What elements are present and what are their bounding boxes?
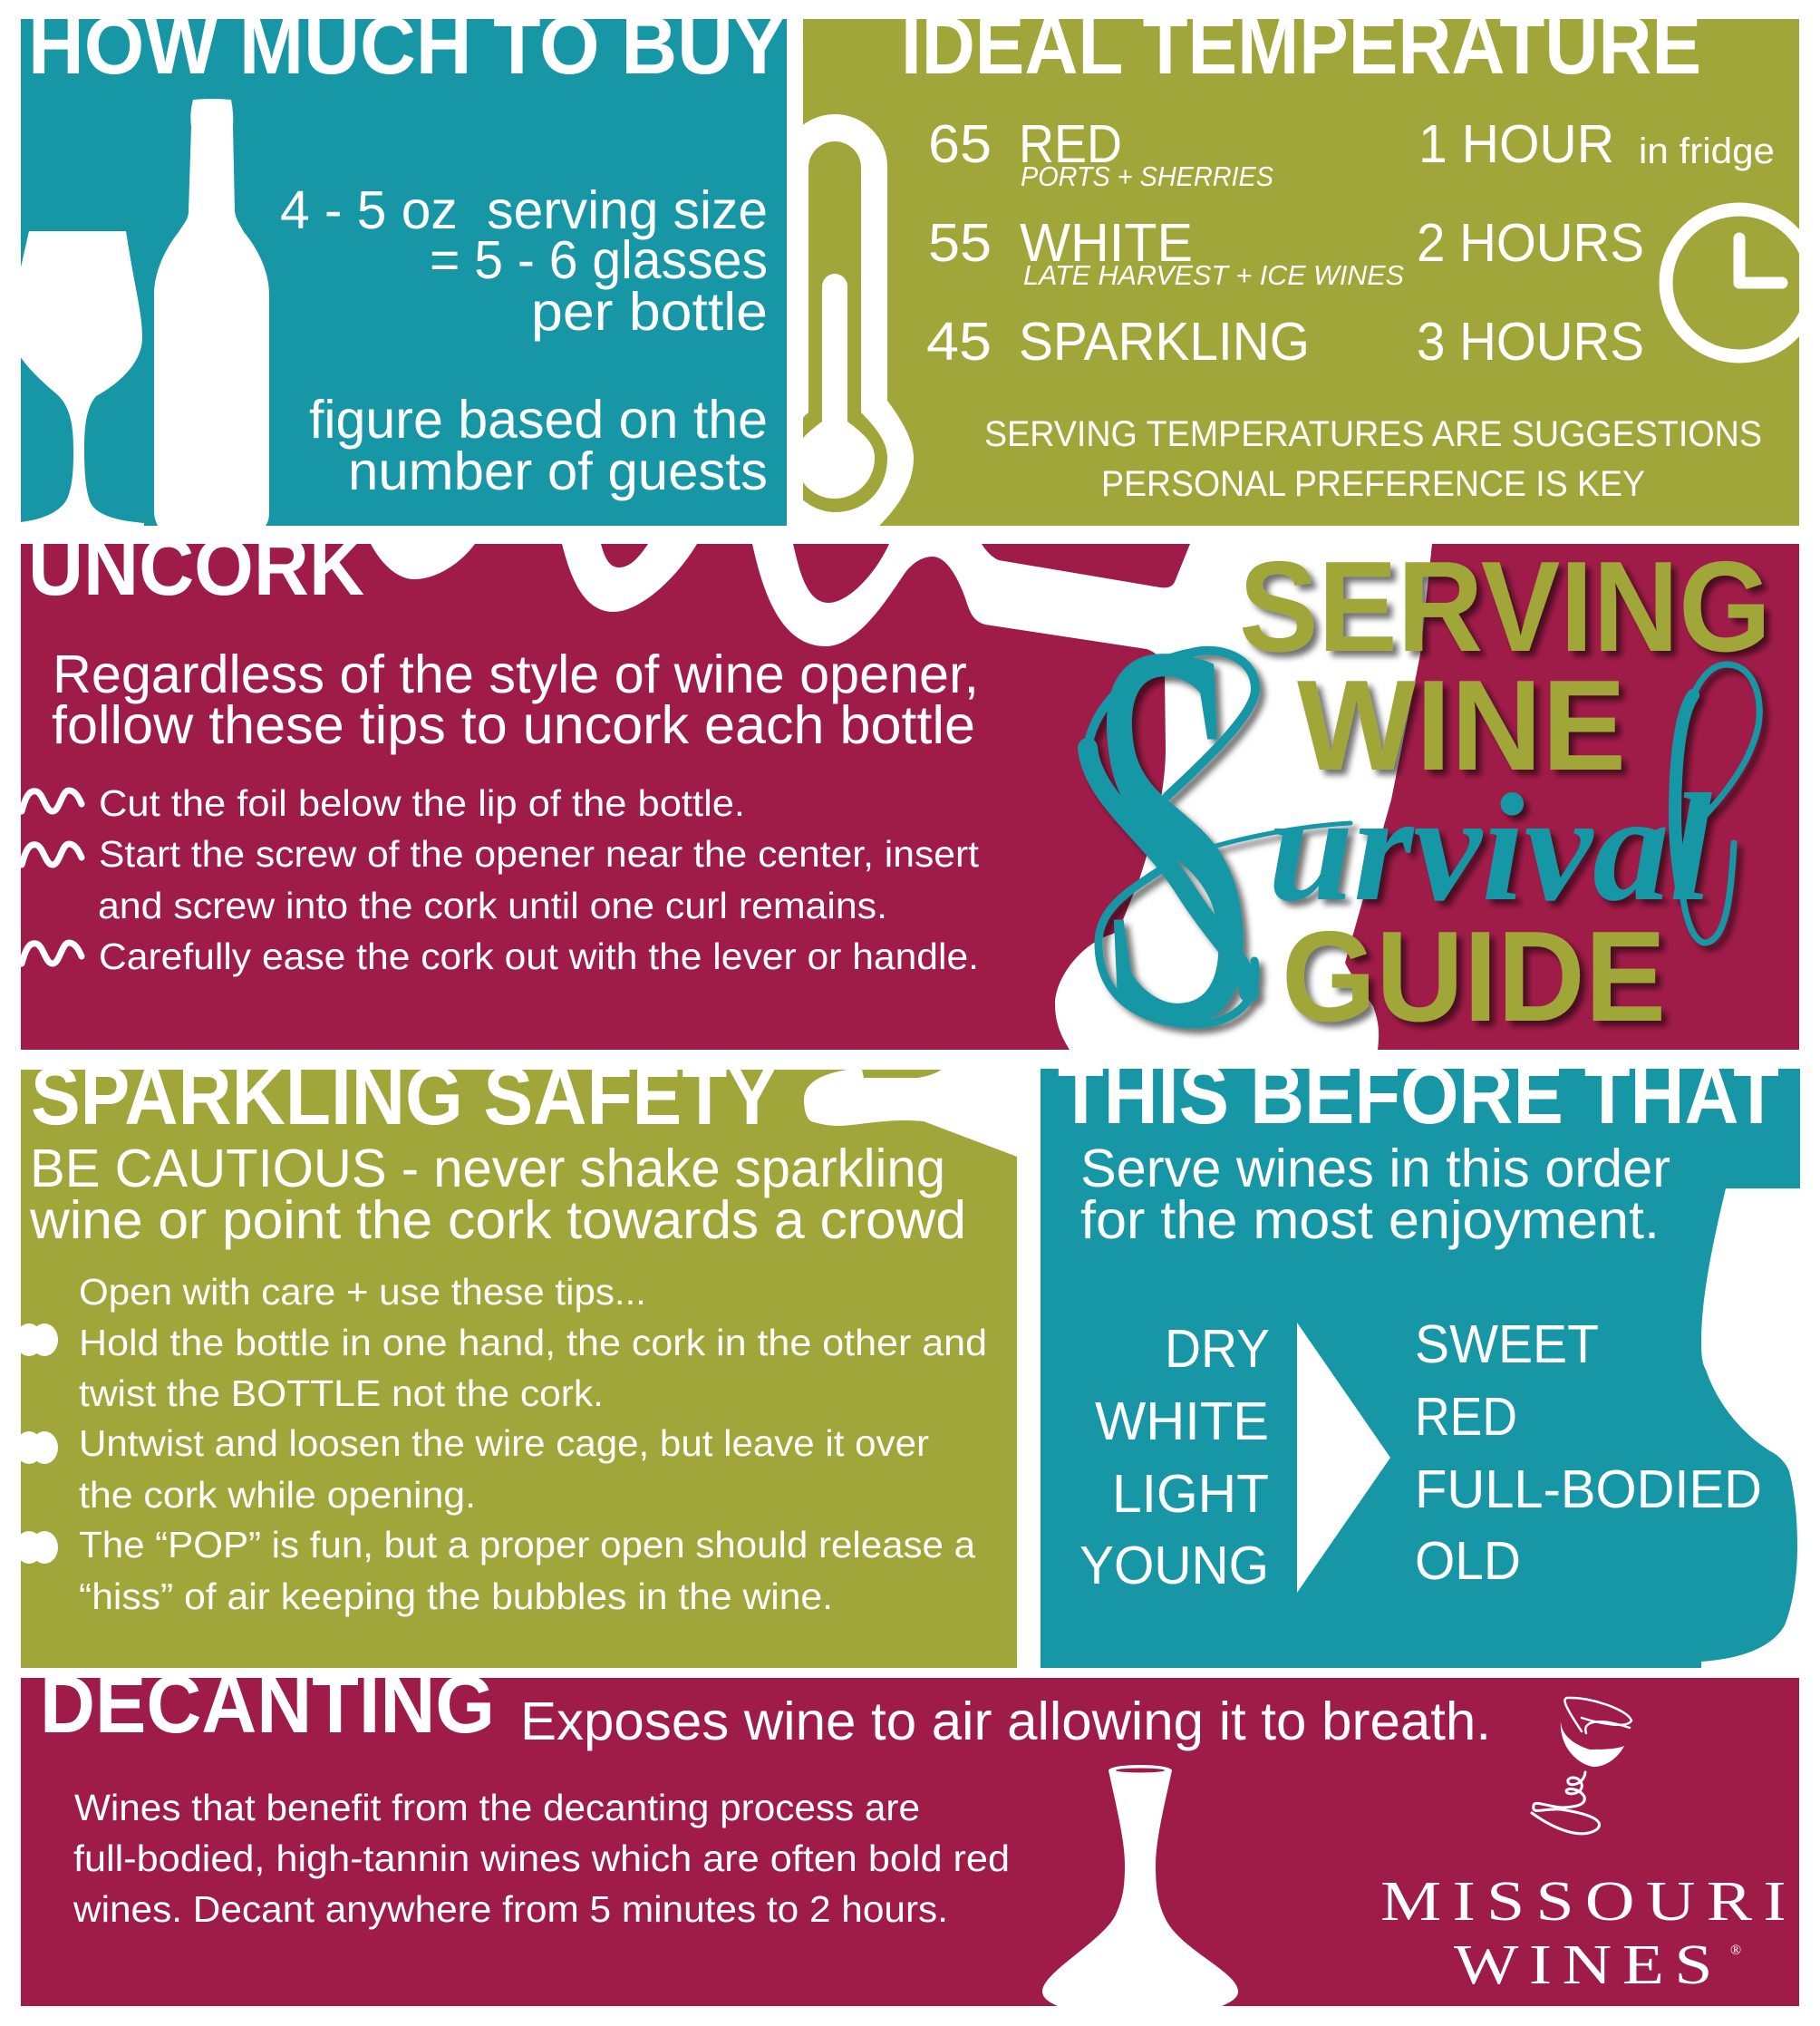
tip: untwist: [79, 1422, 929, 1516]
text: be cautious: wine or point the cork towards a crowd: [29, 1190, 966, 1250]
text: decanting description: wines. Decant anywhere from 5 minutes to 2 hours.: [73, 1888, 948, 1930]
panel: how much to buy: [14, 1, 787, 526]
heading: uncork: UNCORK: [28, 522, 364, 613]
title: survival script: S: [1048, 528, 1285, 1140]
tip 2: [98, 833, 980, 926]
text: serving size: 4 - 5 oz serving size: [280, 180, 768, 240]
logo: missouri wines wordmark: MISSOURI: [1380, 1869, 1786, 1932]
text: be cautious: BE CAUTIOUS - never shake sparkling: [30, 1139, 945, 1198]
note: serving temperatures: [984, 414, 1762, 504]
title: survival script: [1048, 528, 1759, 1140]
list: later wines: [1415, 1314, 1762, 1591]
tip 3: Carefully ease the cork out with the lever or handle.: [99, 935, 979, 977]
text: be cautious: [29, 1139, 966, 1250]
chill times: 3 HOURS: [1417, 312, 1644, 372]
tip: hold the bottle: Hold the bottle in one hand, the cork in the other and: [79, 1322, 987, 1363]
tip: the pop: [79, 1524, 975, 1617]
text: exposes wine: Exposes wine to air allowing it to breath.: [520, 1692, 1491, 1751]
list: first wines: LIGHT: [1112, 1464, 1269, 1524]
text: based on guests: [309, 390, 768, 501]
bullet: cork 3: [21, 1531, 58, 1564]
text: serving size: [280, 180, 768, 342]
chill times: in fridge: [1639, 131, 1775, 171]
list: later wines: RED: [1415, 1387, 1517, 1447]
bullet: cork 2: [21, 1431, 58, 1464]
text: serve order: Serve wines in this order: [1080, 1139, 1670, 1198]
tip: untwist: Untwist and loosen the wire cage, but leave it over: [79, 1422, 929, 1464]
temperature rows: [926, 114, 1404, 372]
logo: missouri wines wordmark: ®: [1730, 1943, 1741, 1958]
tip 1: Cut the foil below the lip of the bottle.: [99, 782, 745, 824]
text: based on guests: number of guests: [348, 441, 768, 501]
title: serving wine guide: GUIDE: [1282, 905, 1666, 1049]
title: serving wine guide: WINE: [1297, 654, 1626, 798]
text: uncork intro: [52, 645, 979, 755]
heading: decanting: DECANTING: [40, 1660, 495, 1750]
icon: wine glass: [14, 231, 144, 526]
illustration: bottle pouring wine into glass: [371, 544, 1432, 1050]
list: later wines: OLD: [1415, 1531, 1521, 1591]
logo: missouri wines glass: [1532, 1698, 1631, 1834]
tip: hold the bottle: [79, 1322, 987, 1414]
bullet: cork 1: [21, 1323, 58, 1356]
icon: decanter: [1042, 1765, 1238, 2007]
text: based on guests: figure based on the: [309, 390, 768, 450]
icon: thermometer: [803, 114, 914, 526]
bullet: wave 2: [22, 844, 82, 865]
title: serving wine guide: [1239, 535, 1771, 1049]
note: serving temperatures: SERVING TEMPERATURES ARE SUGGESTIONS: [984, 414, 1762, 454]
list: first wines: WHITE: [1095, 1391, 1269, 1451]
title: serving wine guide: SERVING: [1239, 535, 1771, 679]
tip 2: and screw into the cork until one curl remains.: [98, 885, 887, 926]
note: serving temperatures: PERSONAL PREFERENCE IS KEY: [1101, 464, 1645, 504]
panel: uncork: [21, 522, 1799, 1050]
tip: hold the bottle: twist the BOTTLE not the cork.: [79, 1372, 604, 1414]
tip: the pop: The “POP” is fun, but a proper open should release a: [79, 1524, 975, 1566]
panel: decanting: [21, 1660, 1799, 2007]
text: decanting description: Wines that benefit from the decanting process are: [74, 1787, 920, 1828]
text: open with care: Open with care + use these tips...: [79, 1271, 646, 1313]
text: decanting description: [73, 1787, 1010, 1930]
flourish: loops and swashes: [1088, 651, 1759, 1024]
title: survival script: urvival: [1268, 762, 1712, 933]
heading: sparkling safety: SPARKLING SAFETY: [31, 1052, 777, 1142]
logo: missouri wines wordmark: [1380, 1869, 1786, 1995]
icon: wine bottle: [154, 99, 269, 526]
temperature rows: 45: [926, 312, 992, 372]
heading: this before that: THIS BEFORE THAT: [1058, 1051, 1779, 1141]
tip: untwist: the cork while opening.: [79, 1474, 476, 1516]
temperature rows: WHITE: [1020, 213, 1193, 273]
bullet: wave 3: [22, 943, 82, 964]
panel: sparkling safety: [15, 1052, 1024, 1668]
panel: ideal temperature: [782, 1, 1813, 526]
text: serving size: = 5 - 6 glasses: [430, 230, 768, 290]
temperature rows: SPARKLING: [1019, 312, 1310, 372]
list: first wines: DRY: [1165, 1319, 1270, 1379]
chill times: [1417, 114, 1775, 372]
text: serving size: per bottle: [531, 282, 768, 342]
temperature rows: LATE HARVEST + ICE WINES: [1023, 259, 1404, 291]
chill times: 2 HOURS: [1417, 213, 1644, 273]
arrow: [1297, 1323, 1390, 1593]
heading: how much to buy: HOW MUCH TO BUY: [28, 1, 785, 92]
icon: clock: [1666, 209, 1813, 356]
list: first wines: YOUNG: [1079, 1536, 1269, 1595]
heading: ideal temperature: IDEAL TEMPERATURE: [901, 1, 1701, 92]
text: serve order: for the most enjoyment.: [1080, 1190, 1660, 1250]
illustration: sparkling bottle neck: [804, 1070, 1017, 1157]
temperature rows: 65: [928, 114, 992, 174]
text: uncork intro: Regardless of the style of wine opener,: [53, 645, 979, 704]
temperature rows: 55: [928, 213, 992, 273]
temperature rows: PORTS + SHERRIES: [1021, 160, 1273, 192]
temperature rows: RED: [1019, 114, 1122, 174]
text: decanting description: full-bodied, high-tannin wines which are often bold red: [73, 1837, 1010, 1879]
text: uncork intro: follow these tips to uncork each bottle: [52, 695, 975, 755]
tip 2: Start the screw of the opener near the center, insert: [99, 833, 980, 875]
panel: this before that: [1041, 1051, 1800, 1668]
tip: the pop: “hiss” of air keeping the bubbles in the wine.: [79, 1575, 833, 1617]
list: later wines: SWEET: [1415, 1314, 1599, 1374]
bullet: wave 1: [22, 790, 82, 811]
text: serve order: [1080, 1139, 1670, 1250]
list: later wines: FULL-BODIED: [1415, 1459, 1762, 1519]
logo: missouri wines wordmark: WINES: [1454, 1933, 1712, 1995]
list: first wines: [1079, 1319, 1270, 1595]
chill times: 1 HOUR: [1418, 114, 1614, 174]
